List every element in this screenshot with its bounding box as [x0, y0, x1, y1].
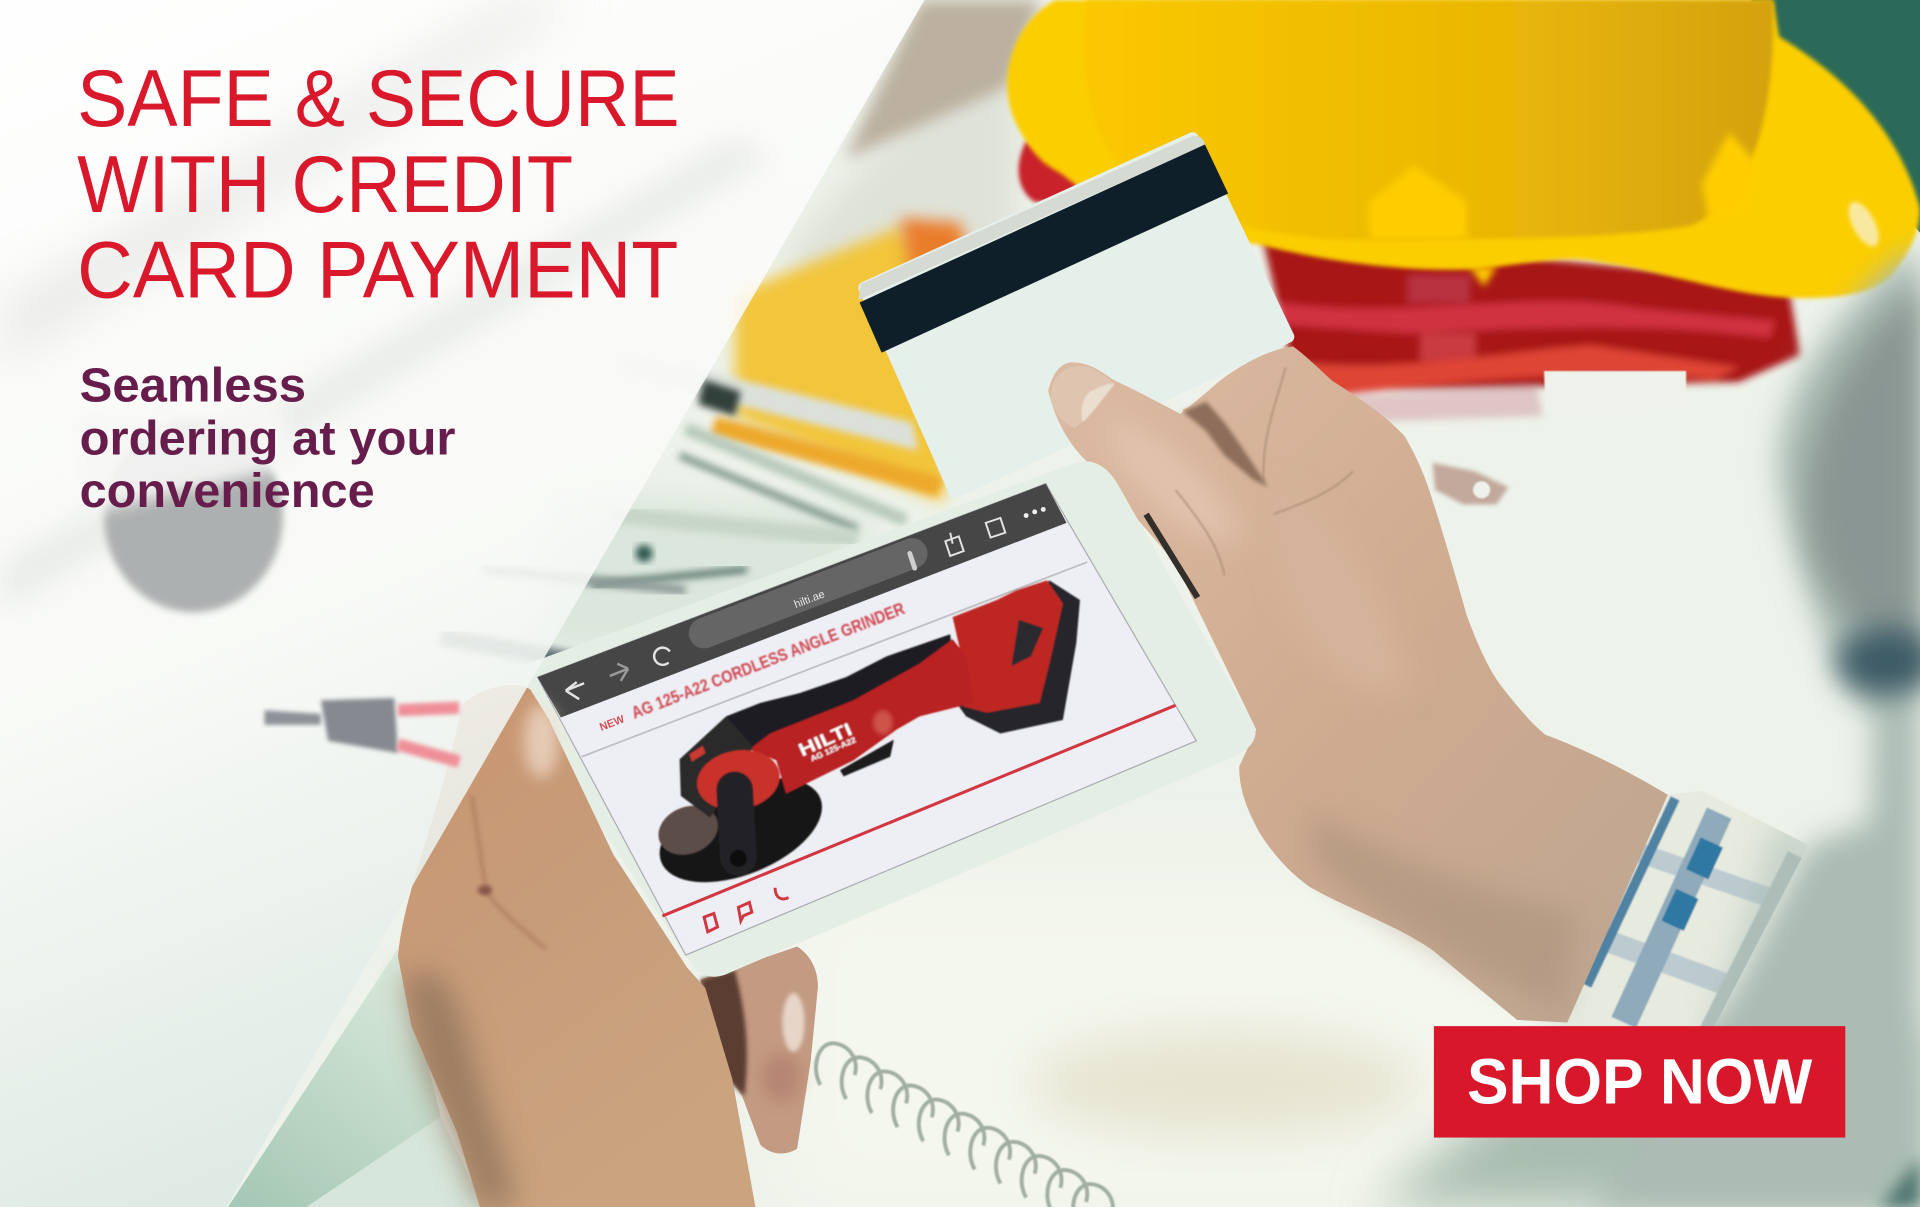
right hand: nail moon	[1082, 384, 1114, 422]
right hand: thumb shading	[1102, 416, 1243, 542]
yellow glimpse behind fingers	[1183, 394, 1227, 422]
icon: tabs	[986, 518, 1005, 538]
grinder: logo: HILTI	[795, 718, 855, 760]
grinder: handle collar	[692, 744, 784, 816]
hat: ridge details	[1369, 132, 1758, 287]
hard hat	[1007, 0, 1920, 505]
header divider	[582, 562, 1087, 757]
grinder: vent panel	[1011, 620, 1043, 666]
left hand: thumb highlight	[524, 704, 558, 778]
card top strip	[858, 136, 1205, 300]
hat: dome	[1084, 0, 1773, 240]
hat: red band left	[1019, 141, 1078, 202]
veil: rolled plan shading	[0, 0, 576, 367]
grinder: side handle	[735, 790, 738, 857]
left hand fingers behind phone	[700, 947, 818, 1153]
grinder: red button	[689, 746, 705, 762]
grinder: battery	[956, 580, 1080, 733]
left hand: left shadow	[404, 970, 514, 1207]
hat: brim	[1007, 0, 1920, 298]
icon: microphone	[910, 553, 915, 568]
right hand: silhouette	[1048, 347, 1668, 1022]
subheading	[80, 360, 456, 518]
white diagonal veil	[0, 0, 924, 1207]
finger red shading	[762, 1053, 801, 1102]
shop now button: SHOP NOW	[1467, 1046, 1813, 1117]
smartphone	[505, 461, 1256, 977]
grinder: under switch	[840, 740, 894, 776]
notebook spiral	[816, 1043, 1113, 1207]
icon: share	[945, 533, 964, 556]
hat: tan bracket	[1433, 463, 1509, 504]
green wedge below veil	[228, 949, 484, 1207]
left hand: knuckle crease	[471, 796, 546, 949]
headline: SAFE & SECURE	[77, 54, 680, 144]
icon: reload	[654, 648, 670, 665]
shop now button	[1434, 1026, 1845, 1138]
blurred yellow folder and pens	[441, 218, 980, 661]
screen: red rule	[662, 705, 1176, 916]
icon: menu dots	[1026, 509, 1043, 516]
magnetic stripe	[860, 144, 1228, 353]
browser toolbar	[538, 484, 1067, 718]
credit card	[858, 136, 1288, 492]
right hand	[1048, 347, 1668, 1022]
subheading: Seamless	[80, 360, 306, 413]
finger dark gap	[700, 970, 747, 1096]
phone body	[505, 461, 1256, 977]
veil: grey circle end of roll	[104, 421, 283, 612]
hat: red layers	[1261, 233, 1800, 422]
veil: divider tool pink arms	[398, 708, 459, 762]
headline: WITH CREDIT	[77, 140, 573, 230]
subheading: ordering at your	[80, 412, 456, 465]
grinder: disc face	[651, 797, 725, 863]
plaid shirt cuff	[1576, 791, 1807, 1026]
right hand: wrist shadow	[1310, 808, 1580, 1010]
screen: new label: NEW	[598, 713, 627, 734]
veil: divider tool block	[321, 698, 398, 753]
left hand	[398, 685, 756, 1207]
hat: corner background	[1751, 0, 1920, 233]
url text: hilti.ae	[793, 588, 827, 611]
right hand: thumb nail	[1051, 366, 1114, 429]
grinder: top grip	[720, 634, 953, 760]
grinder: handle end	[730, 850, 747, 867]
grinder: model: AG 125-A22	[809, 735, 858, 763]
headline	[77, 54, 680, 316]
finger silhouette	[700, 947, 818, 1153]
veil: divider tool handle	[264, 710, 321, 725]
grinder: head	[680, 716, 753, 818]
finger nail	[782, 993, 804, 1052]
screen: product title: AG 125-A22 CORDLESS ANGLE GRINDER	[628, 598, 908, 723]
right hand: creases	[1176, 367, 1353, 576]
headline: CARD PAYMENT	[77, 226, 678, 316]
icon: back arrow	[566, 682, 584, 699]
phone side button	[1146, 514, 1198, 598]
grinder: motor housing	[953, 580, 1063, 713]
grinder: guard disc	[645, 757, 837, 903]
screen: footer icons	[704, 888, 789, 932]
subheading: convenience	[80, 465, 375, 518]
left hand: palm and thumb	[398, 685, 756, 1207]
right hand: finger fold	[1183, 402, 1269, 487]
phone screen	[538, 484, 1196, 955]
address bar	[704, 553, 912, 633]
angle grinder	[645, 580, 1080, 903]
grinder: red body	[749, 639, 973, 793]
blurred shoulder on the right	[1592, 245, 1920, 1207]
hat: bracket hole	[1473, 481, 1490, 498]
hat: white clip	[1544, 371, 1686, 413]
hat: glare	[1842, 197, 1885, 251]
grinder: body highlight	[873, 710, 893, 735]
left hand: crease dark spot	[478, 885, 492, 895]
right hand: knuckle highlight	[1273, 490, 1408, 690]
card body	[864, 138, 1288, 492]
icon: forward arrow	[610, 664, 628, 681]
